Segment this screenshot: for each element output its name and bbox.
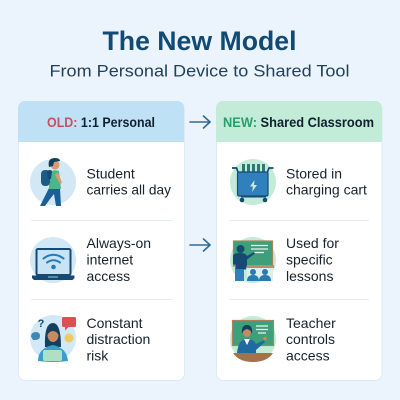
item: stored in charging cart xyxy=(230,159,367,205)
item: student carries all day xyxy=(30,158,171,206)
text: teacher controls access: access xyxy=(286,348,330,364)
title: The New Model xyxy=(102,26,296,56)
text: stored in charging cart: charging cart xyxy=(286,182,367,198)
icon: teacher at desk xyxy=(230,316,276,362)
text: constant distraction risk: Constant xyxy=(86,315,143,331)
new panel header: NEW: Shared Classroom xyxy=(223,115,374,130)
text: always-on internet access: Always-on xyxy=(86,235,151,251)
text: always-on internet access: access xyxy=(86,268,130,284)
icon: laptop with wifi xyxy=(30,237,76,283)
panel: old model xyxy=(18,101,184,380)
icon: charging cart xyxy=(230,159,276,205)
text: student carries all day: Student xyxy=(86,166,135,182)
new panel header xyxy=(216,101,382,142)
item: teacher controls access xyxy=(230,315,336,364)
text: stored in charging cart: Stored in xyxy=(286,166,342,182)
text: constant distraction risk: risk xyxy=(86,348,109,364)
old panel header: OLD: 1:1 Personal xyxy=(47,115,155,130)
subtitle: From Personal Device to Shared Tool xyxy=(50,62,350,80)
text: teacher controls access: controls xyxy=(286,331,335,347)
text: student carries all day: carries all day xyxy=(86,182,171,198)
icon: distracted student with laptop: ? xyxy=(38,318,45,330)
item: constant distraction risk xyxy=(30,315,150,364)
arrow: middle row old to new xyxy=(190,239,210,251)
text: always-on internet access: internet xyxy=(86,252,133,268)
arrow: header old to new xyxy=(190,116,210,128)
text: teacher controls access: Teacher xyxy=(286,315,336,331)
text: used for specific lessons: Used for xyxy=(286,235,339,251)
text: used for specific lessons: lessons xyxy=(286,268,333,284)
text: constant distraction risk: distraction xyxy=(86,331,150,347)
icon: teacher at board with students xyxy=(230,237,276,283)
old panel header xyxy=(18,101,184,142)
icon: walking student xyxy=(30,158,76,206)
panel: new model xyxy=(216,101,382,380)
text: used for specific lessons: specific xyxy=(286,252,333,268)
item: always-on internet access xyxy=(30,235,151,284)
item: used for specific lessons xyxy=(230,235,339,284)
